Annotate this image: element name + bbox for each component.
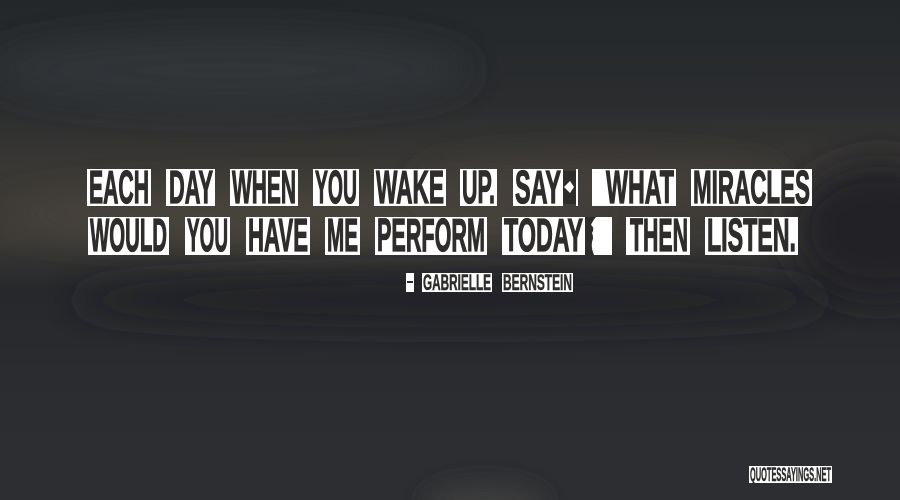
- quote line 2: YOU: [187, 209, 228, 261]
- quote line 1: DAY: [169, 161, 213, 213]
- quote line 1: WHAT: [606, 161, 674, 213]
- quote line 2: PERFORM: [377, 209, 485, 261]
- watermark: quotessayings.net: [749, 465, 832, 486]
- quote line 2: ME: [327, 209, 358, 261]
- quote line 1: UP.: [462, 161, 495, 213]
- quote line 1: WHEN: [232, 161, 296, 213]
- quote text: [87, 161, 812, 261]
- quote line 2: TODAY: [504, 209, 583, 261]
- quote line 1: SAY: [515, 161, 561, 213]
- quote line 2: LISTEN.: [707, 209, 796, 261]
- quote line 1: WAKE: [376, 161, 444, 213]
- quote line 1: YOU: [315, 161, 357, 213]
- quote line 1: [87, 161, 812, 213]
- quote line 2: THEN: [630, 209, 688, 261]
- quote line 2: WOULD: [90, 209, 167, 261]
- quote line 2: [88, 209, 798, 261]
- author attribution: GABRIELLE: [423, 270, 491, 295]
- quote line 2: HAVE: [248, 209, 308, 261]
- quote line 1: EACH: [89, 161, 149, 213]
- author attribution: BERNSTEIN: [503, 270, 572, 295]
